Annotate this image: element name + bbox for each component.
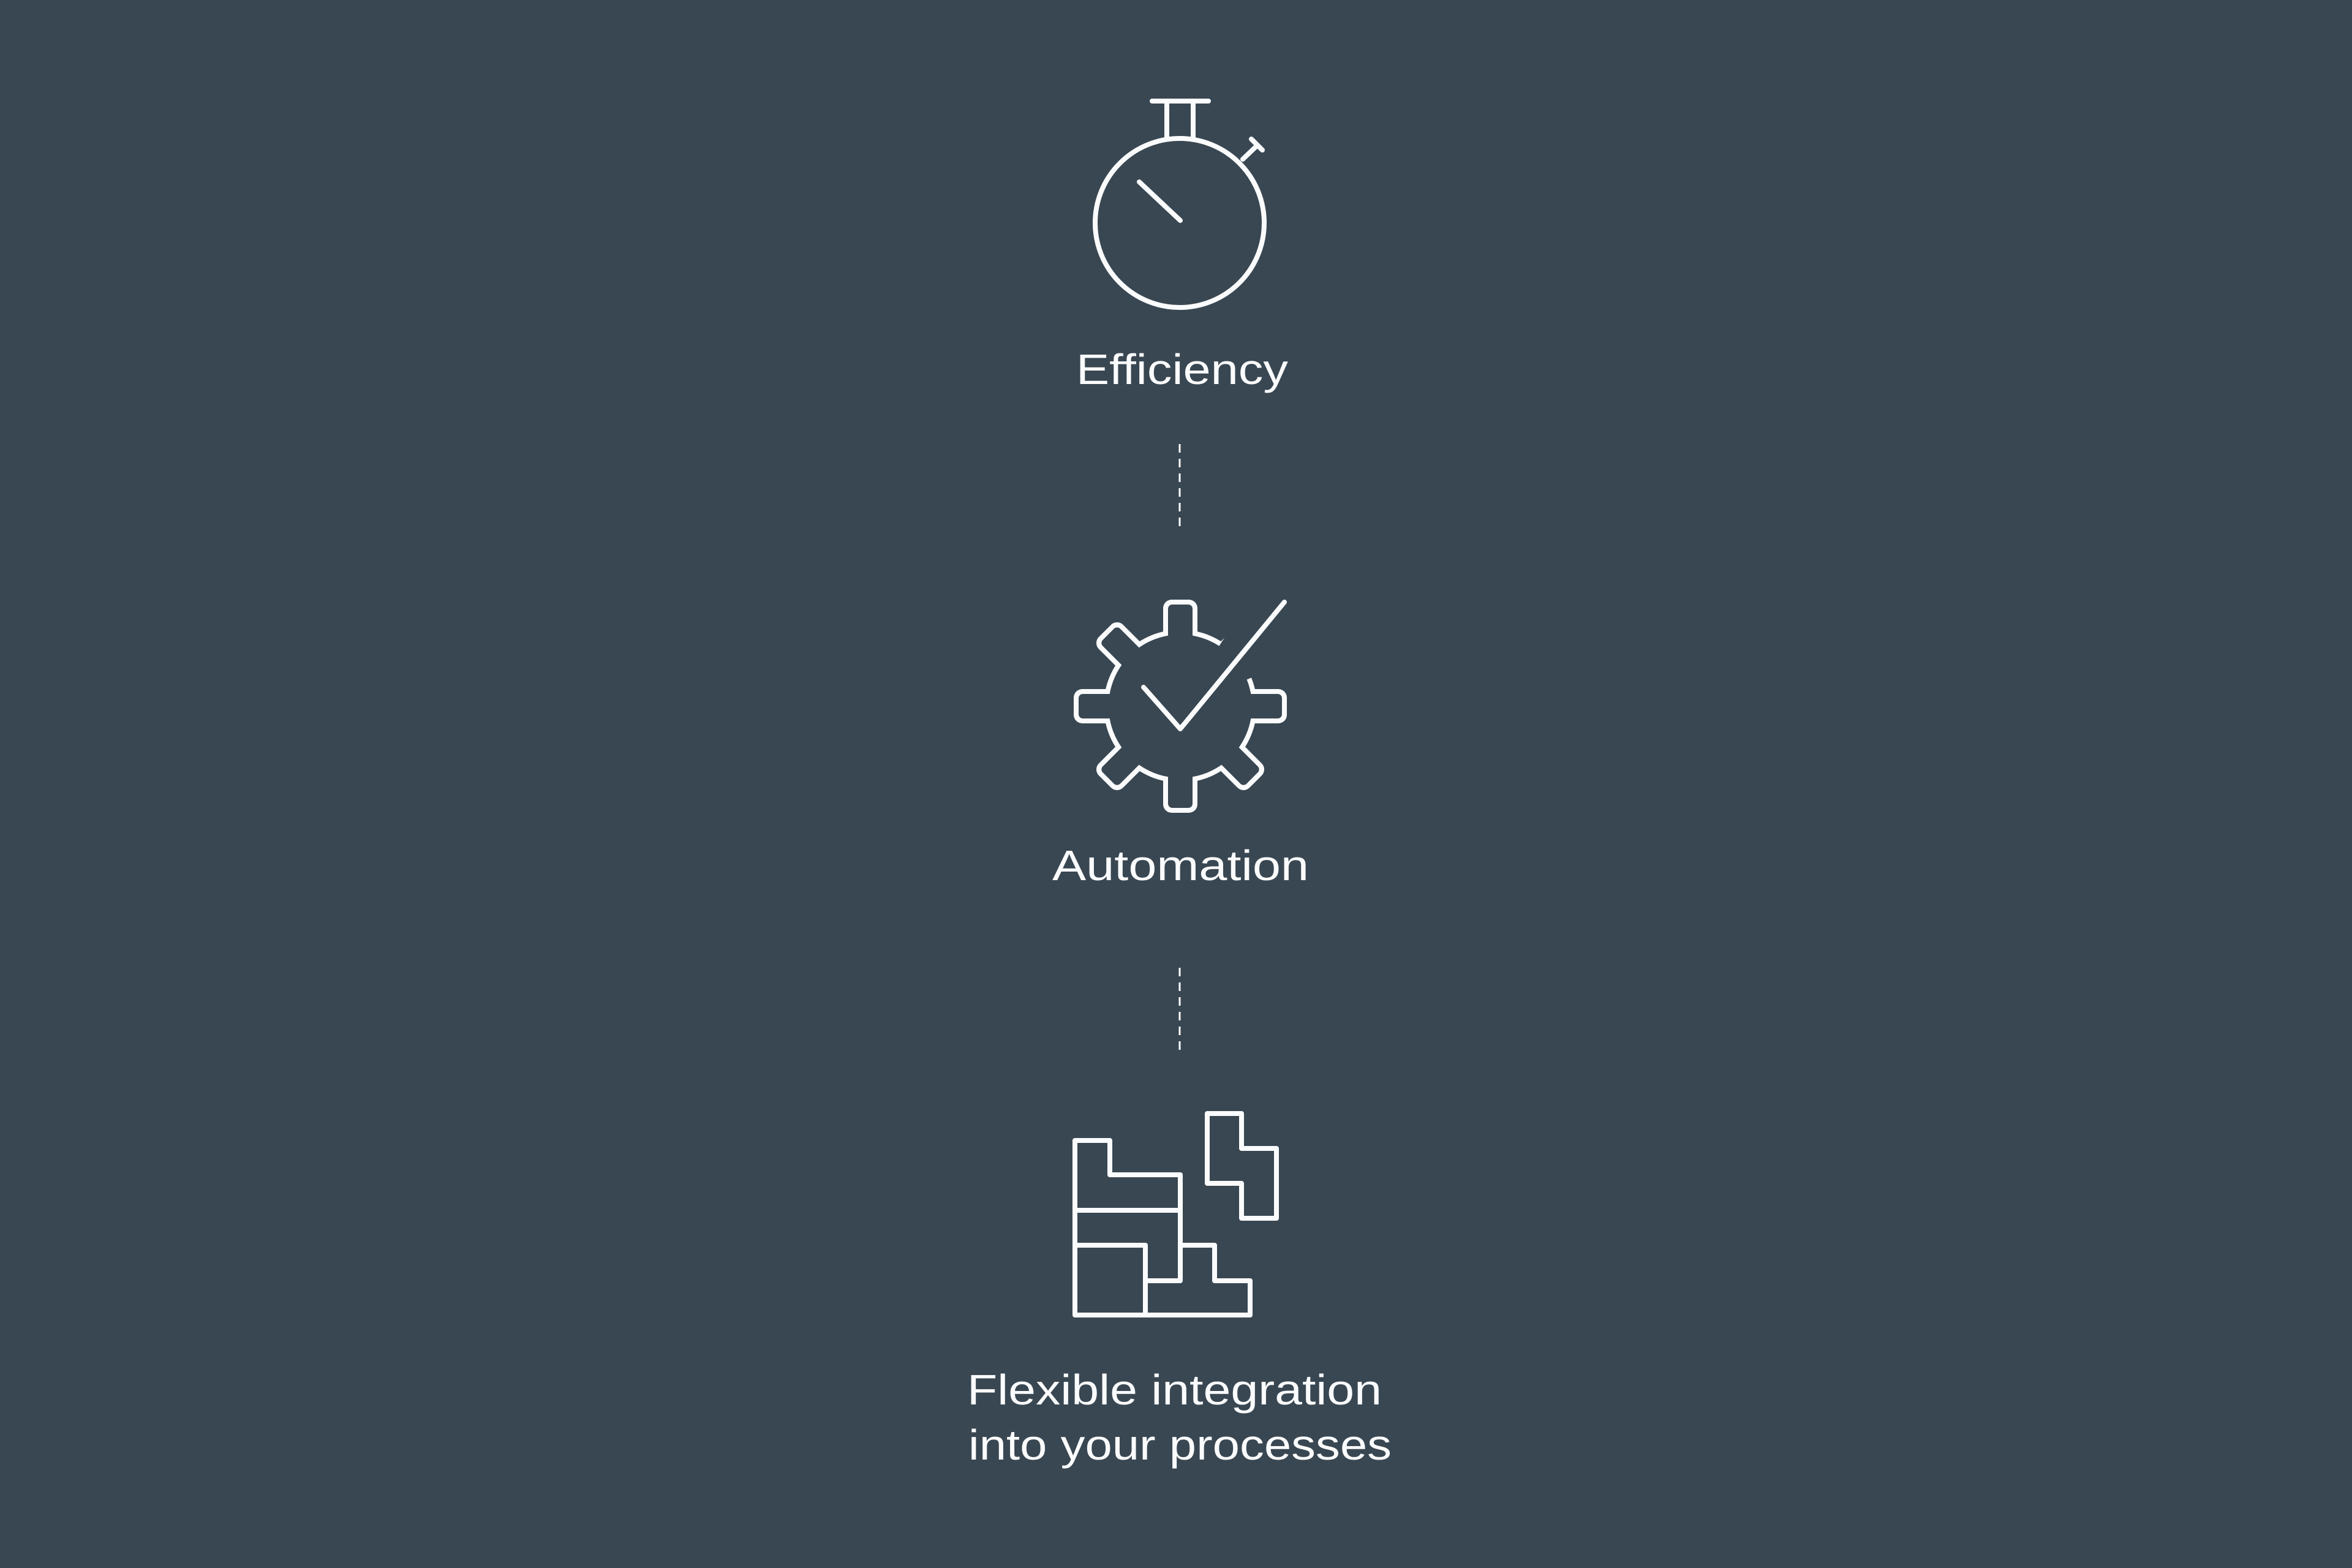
connector dashes 1 (1178, 444, 1181, 528)
label: Flexible integration into your processes (967, 1366, 1392, 1469)
label: Efficiency: Efficiency (1076, 345, 1288, 393)
label: Flexible integration into your processes: Flexible integration (967, 1366, 1382, 1414)
icon: tetris blocks (1075, 1114, 1276, 1315)
label: Automation: Automation (1052, 842, 1309, 889)
icon: gear with check (1074, 600, 1294, 813)
label: Flexible integration into your processes: into your processes (968, 1421, 1392, 1469)
connector dashes 2 (1178, 968, 1181, 1050)
icon: stopwatch (1095, 101, 1264, 307)
